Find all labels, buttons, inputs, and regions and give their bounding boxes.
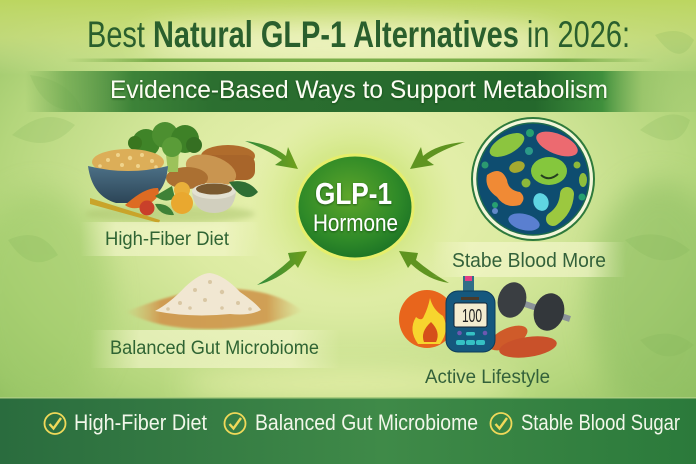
blue microbe — [507, 210, 541, 234]
red insoles — [485, 321, 558, 361]
label: Balanced Gut Microbiome — [110, 338, 319, 359]
red microbe — [533, 126, 581, 162]
tomato — [140, 200, 154, 216]
benefit: high-fiber diet — [44, 410, 207, 435]
benefit text: Balanced Gut Microbiome — [255, 410, 478, 435]
broccoli — [128, 122, 202, 172]
green microbe top left — [486, 128, 528, 162]
grain bowl — [88, 149, 168, 203]
hub subtitle: Hormone — [313, 210, 398, 237]
pickle microbe — [553, 194, 567, 219]
benefit: stable blood sugar — [490, 410, 680, 435]
pasta sticks — [90, 198, 160, 223]
icon: lifestyle group — [399, 276, 570, 361]
carrot — [125, 188, 159, 208]
arrow: gut panel to hub — [410, 142, 465, 169]
benefit: balanced gut microbiome — [224, 410, 478, 435]
label band — [80, 222, 260, 256]
bread loaves — [166, 145, 255, 191]
check icon — [44, 413, 66, 434]
cyan microbe — [531, 191, 551, 213]
label band — [432, 242, 626, 277]
panel: gut microbes — [432, 118, 626, 277]
icon: microbe circle — [472, 118, 594, 240]
orange microbe — [486, 171, 524, 206]
meter reading: 100 — [462, 306, 482, 326]
hub title: GLP-1 — [315, 176, 392, 211]
arrow: high-fiber diet to hub — [245, 141, 298, 169]
panel: active lifestyle — [399, 276, 570, 388]
subtitle: Evidence-Based Ways to Support Metabolism — [110, 76, 608, 104]
leaves — [155, 186, 175, 215]
flame badge — [399, 290, 455, 348]
subtitle band — [25, 71, 696, 112]
panel: high-fiber diet — [80, 122, 260, 256]
label band — [90, 330, 340, 368]
basil leaf — [229, 181, 258, 197]
glucose meter — [446, 276, 495, 352]
panel: balanced gut microbiome — [90, 273, 340, 368]
seed bowl — [192, 183, 236, 213]
smile — [541, 174, 558, 178]
icon: fiber powder on board — [125, 273, 303, 329]
arrow: active lifestyle to hub — [399, 251, 449, 283]
title underline — [65, 58, 655, 62]
arrow: microbiome panel to hub — [257, 251, 307, 285]
footer band — [0, 397, 696, 464]
benefit text: High-Fiber Diet — [74, 410, 207, 435]
yellow fruit — [171, 182, 193, 214]
icon: food group — [85, 122, 258, 223]
olive microbe — [508, 159, 526, 175]
label: High-Fiber Diet — [105, 229, 230, 250]
GLP-1 hormone hub — [250, 110, 460, 300]
check icon — [490, 413, 512, 434]
title: Best Natural GLP-1 Alternatives in 2026: — [87, 14, 630, 55]
small dots — [482, 129, 587, 214]
check icon — [224, 413, 246, 434]
label: Stabe Blood More — [452, 250, 606, 272]
label: Active Lifestyle — [425, 367, 550, 388]
dumbbell — [493, 279, 570, 335]
smiling microbe — [531, 157, 567, 185]
